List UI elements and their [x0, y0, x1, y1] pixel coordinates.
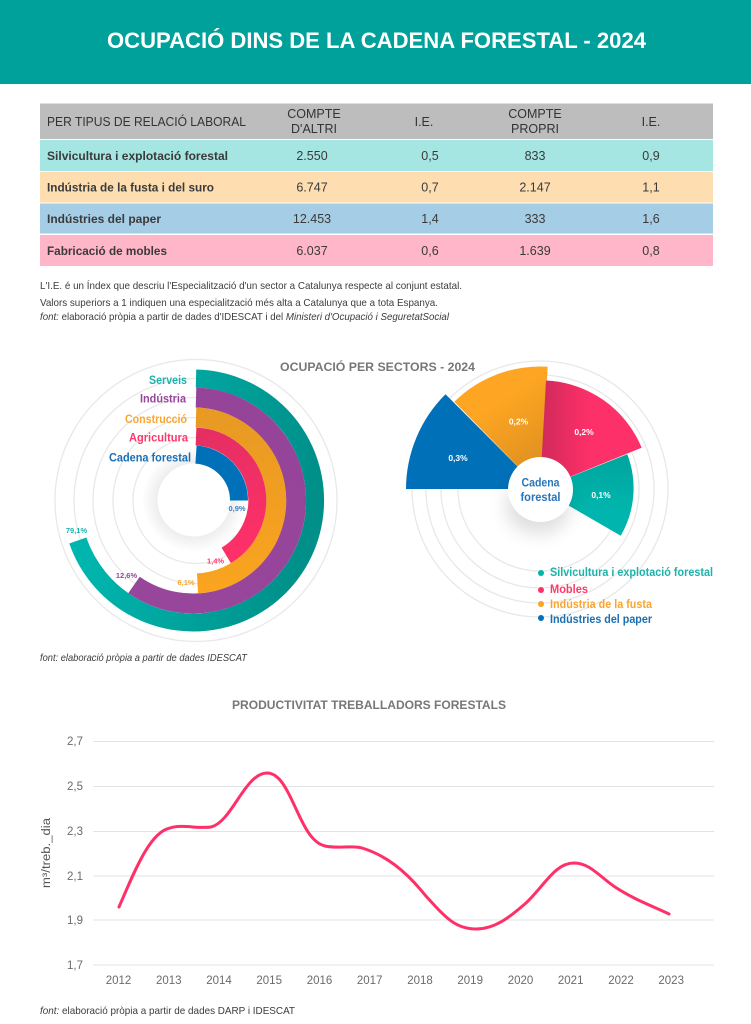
table header row: COMPTE	[287, 107, 341, 121]
row: fusta i suro	[40, 172, 713, 202]
row: mobles	[40, 235, 713, 266]
ring labels: Indústria	[140, 392, 186, 406]
row: paper	[40, 204, 713, 234]
ring: cadena forestal 0,9%	[196, 455, 239, 500]
row: silvicultura: 0,9	[642, 149, 660, 163]
ring value labels: 6,1%	[177, 578, 195, 587]
ring value labels: 12,6%	[116, 571, 137, 580]
centre label: cadena forestal: Cadena	[522, 478, 560, 490]
row: mobles: 1.639	[519, 244, 551, 258]
chart: forest chain wedge chart	[406, 361, 713, 626]
table header row: I.E.	[642, 115, 660, 129]
legend: Indústria de la fusta	[550, 597, 652, 611]
x axis labels: 2023	[658, 975, 684, 987]
row: paper: 1,6	[642, 212, 660, 226]
row: mobles: 0,8	[642, 244, 660, 258]
panel: employment table	[40, 104, 713, 266]
row: fusta i suro: 0,7	[421, 180, 439, 194]
ring labels: Agricultura	[129, 430, 188, 444]
x axis labels: 2020	[508, 975, 533, 987]
ring labels: Cadena forestal	[109, 450, 191, 464]
ring: agricultura 1,4%	[196, 437, 257, 555]
row: paper: 333	[525, 212, 545, 226]
row: paper: 1,4	[421, 212, 439, 226]
table header row: PROPRI	[511, 122, 559, 136]
x axis labels: 2012	[106, 975, 131, 987]
legend: Silvicultura i explotació forestal	[550, 565, 713, 579]
row: mobles: 0,6	[421, 244, 439, 258]
wedge: silvicultura 0,1%	[540, 454, 634, 536]
x axis labels: 2013	[156, 975, 182, 987]
table header row: I.E.	[415, 115, 433, 129]
row: silvicultura: 0,5	[421, 149, 439, 163]
centre label: cadena forestal	[508, 457, 573, 522]
table header row: D'ALTRI	[291, 122, 337, 136]
ring labels: Serveis	[149, 373, 187, 387]
row: paper: Indústries del paper	[47, 212, 161, 226]
ring labels: Construcció	[125, 412, 187, 426]
y axis labels	[67, 736, 83, 972]
table notes and source: L'I.E. é un Índex que descriu l'Especialització d'un sector a Catalunya respecte al conjunt estatal.	[40, 279, 462, 292]
chart: productivity line chart	[41, 736, 714, 987]
ring labels	[109, 373, 191, 464]
legend: Indústries del paper	[550, 612, 652, 626]
wedge value labels: 0,2%	[574, 427, 594, 437]
table header row: PER TIPUS DE RELACIÓ LABORAL	[47, 114, 246, 129]
legend	[538, 565, 713, 626]
row: fusta i suro: 6.747	[296, 180, 328, 194]
ring value labels: 79,1%	[66, 526, 87, 535]
row: mobles: Fabricació de mobles	[47, 244, 167, 258]
x axis labels: 2019	[457, 975, 483, 987]
row: silvicultura: Silvicultura i explotació forestal	[47, 149, 228, 163]
ring: indústria 12,6%	[134, 398, 296, 603]
ring value labels: 0,9%	[228, 504, 246, 513]
source: radial chart: font: elaboració pròpia a partir de dades IDESCAT	[40, 652, 248, 664]
x axis labels: 2018	[407, 975, 433, 987]
wedge value labels: 0,3%	[448, 453, 468, 463]
x axis labels: 2022	[608, 975, 634, 987]
data line	[119, 773, 669, 929]
wedge: mobles 0,2%	[540, 380, 642, 489]
x axis labels: 2015	[256, 975, 282, 987]
table notes and source: font: elaboració pròpia a partir de dades d'IDESCAT i del Ministeri d'Ocupació i SeguretatSocial	[40, 311, 450, 323]
y axis labels: 2,7	[67, 736, 83, 748]
ring: serveis 79,1%	[78, 379, 315, 623]
wedge: indústries del paper 0,3%	[406, 394, 540, 489]
y axis labels: 2,1	[67, 871, 83, 883]
title banner: OCUPACIÓ DINS DE LA CADENA FORESTAL - 2024	[107, 28, 646, 53]
ring value labels: 1,4%	[207, 556, 224, 566]
wedge value labels	[448, 416, 611, 500]
row: fusta i suro: 1,1	[642, 180, 660, 194]
centre label: cadena forestal: forestal	[520, 492, 560, 504]
row: silvicultura: 2.550	[296, 149, 328, 163]
row: paper: 12.453	[293, 212, 331, 226]
wedge value labels: 0,1%	[591, 490, 611, 500]
y axis title: m³/treb._dia	[41, 817, 53, 888]
x axis labels: 2014	[206, 975, 232, 987]
row: fusta i suro: 2.147	[519, 180, 551, 194]
wedge: indústria de la fusta 0,2%	[454, 366, 548, 489]
wedge value labels: 0,2%	[509, 416, 529, 426]
chart: radial bars by sector	[55, 360, 337, 642]
table header row: COMPTE	[508, 107, 562, 121]
heading: ocupació per sectors: OCUPACIÓ PER SECTORS - 2024	[280, 359, 475, 374]
table notes and source: Valors superiors a 1 indiquen una especialització més alta a Catalunya que a tota Espanya.	[40, 297, 438, 309]
source: line chart: font: elaboració pròpia a partir de dades DARP i IDESCAT	[40, 1005, 296, 1017]
row: fusta i suro: Indústria de la fusta i del suro	[47, 180, 214, 194]
y axis labels: 2,3	[67, 826, 83, 838]
row: mobles: 6.037	[296, 244, 328, 258]
row: silvicultura	[40, 140, 713, 171]
x axis labels: 2016	[307, 975, 332, 987]
table header row	[40, 104, 713, 139]
ring: construcció 6,1%	[196, 418, 276, 583]
y axis labels: 1,9	[67, 915, 83, 927]
x axis labels: 2021	[558, 975, 583, 987]
title banner	[0, 0, 751, 84]
y axis labels: 2,5	[67, 781, 83, 793]
ring value labels	[66, 504, 246, 587]
table notes and source	[40, 279, 462, 323]
row: silvicultura: 833	[525, 149, 545, 163]
heading: productivitat: PRODUCTIVITAT TREBALLADORS FORESTALS	[232, 698, 506, 712]
x axis labels: 2017	[357, 975, 382, 987]
legend: Mobles	[550, 582, 588, 596]
y axis labels: 1,7	[67, 960, 83, 972]
x axis labels	[106, 975, 684, 987]
